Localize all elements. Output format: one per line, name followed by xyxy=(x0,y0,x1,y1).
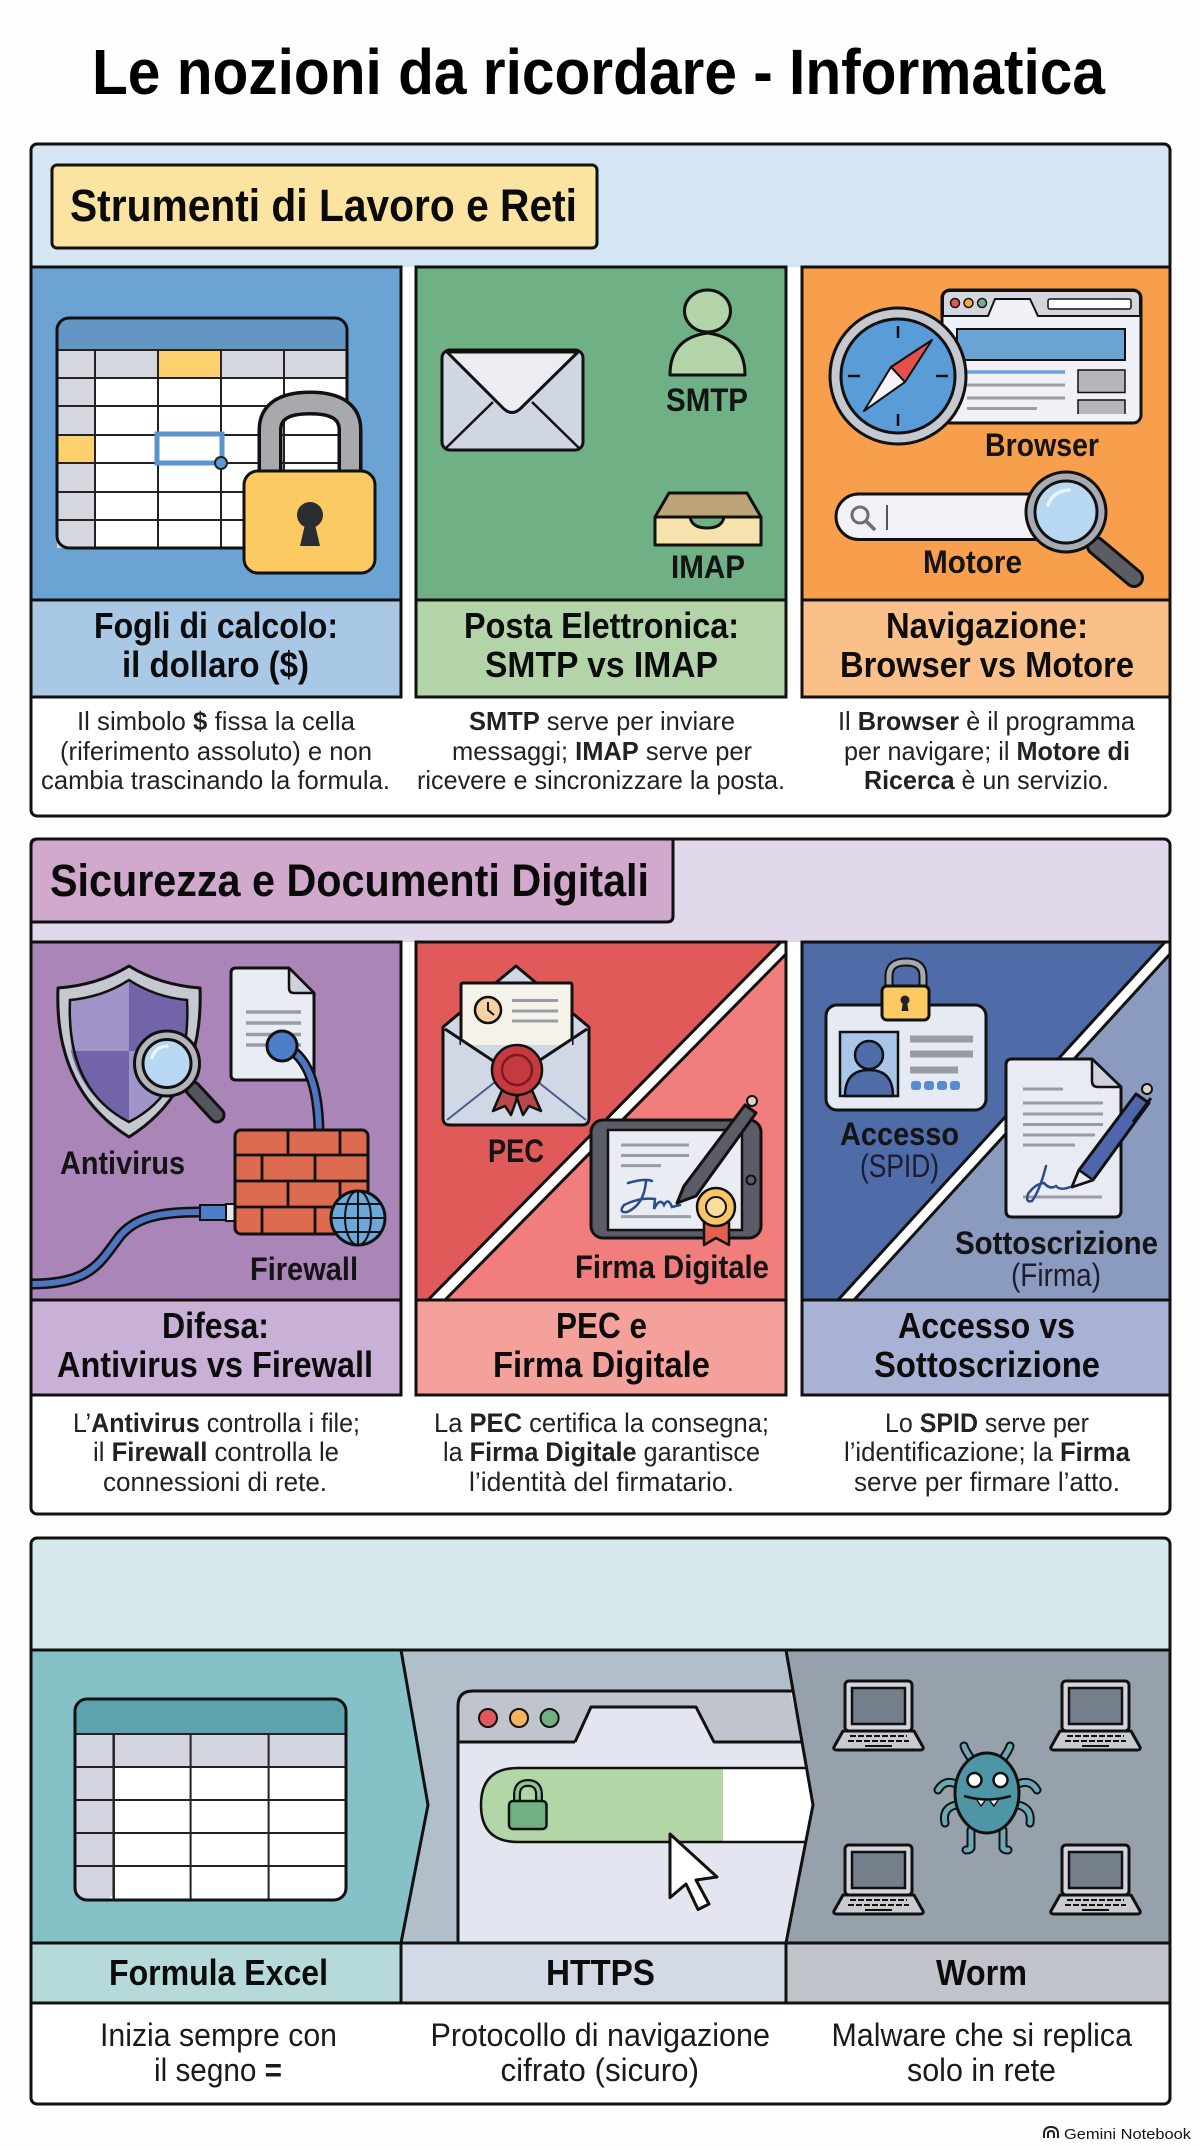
caption: Worm xyxy=(786,1943,1170,2003)
icon: stylus xyxy=(677,1096,757,1203)
description: l’identificazione; la Firma xyxy=(844,1437,1131,1467)
description: Formula Excel xyxy=(100,2017,337,2088)
description: cambia trascinando la formula. xyxy=(41,765,390,795)
card: Navigazione xyxy=(802,267,1170,795)
label: Sottoscrizione (Firma): (Firma) xyxy=(1011,1257,1101,1293)
description: Ricerca è un servizio. xyxy=(864,765,1109,795)
caption bar: SMTP vs IMAP xyxy=(485,644,718,685)
icon: magnifier xyxy=(134,1031,217,1115)
label: Sottoscrizione (Firma): Sottoscrizione xyxy=(955,1225,1158,1261)
icon: globe xyxy=(331,1191,385,1245)
heading: Sicurezza e Documenti Digitali: Sicurezza e Documenti Digitali xyxy=(50,855,649,906)
card: Formula Excel xyxy=(31,1650,428,1943)
caption bar: PEC e xyxy=(556,1305,647,1346)
label: IMAP: IMAP xyxy=(671,549,745,585)
description: l’identità del firmatario. xyxy=(469,1467,734,1497)
heading: Sicurezza e Documenti Digitali xyxy=(31,839,673,922)
icon: tablet with signature xyxy=(591,1120,761,1238)
icon: pen xyxy=(1072,1084,1152,1187)
label: Accesso (SPID) xyxy=(840,1116,959,1184)
description xyxy=(844,1408,1131,1497)
icon: shield xyxy=(58,966,200,1137)
caption: HTTPS: HTTPS xyxy=(546,1952,655,1993)
description: HTTPS xyxy=(430,2017,770,2088)
description: SMTP serve per inviare xyxy=(469,706,735,736)
icon: PEC envelope xyxy=(443,966,589,1125)
title: Le nozioni da ricordare - Informatica xyxy=(92,36,1105,108)
label: Browser: Browser xyxy=(985,427,1099,463)
caption bar: Firma Digitale xyxy=(493,1344,710,1385)
description: il Firewall controlla le xyxy=(93,1437,339,1467)
icon: person SMTP xyxy=(670,290,745,375)
icon: padlock xyxy=(882,962,929,1020)
label: Accesso (SPID): Accesso xyxy=(840,1116,959,1152)
description: Lo SPID serve per xyxy=(885,1408,1089,1438)
description: connessioni di rete. xyxy=(103,1467,327,1497)
description: Worm xyxy=(832,2017,1132,2088)
caption bar: Navigazione: xyxy=(886,605,1088,646)
icon: spreadsheet xyxy=(75,1699,346,1900)
description: Il simbolo $ fissa la cella xyxy=(77,706,356,736)
icon: firewall xyxy=(235,1130,368,1234)
label: Antivirus: Antivirus xyxy=(60,1145,185,1181)
description: (riferimento assoluto) e non xyxy=(60,736,372,766)
description: per navigare; il Motore di xyxy=(844,736,1130,766)
icon: envelope xyxy=(442,350,583,450)
label: Firewall: Firewall xyxy=(250,1251,358,1287)
label: PEC: PEC xyxy=(488,1133,544,1169)
caption bar xyxy=(31,1300,401,1395)
panel: Sicurezza e Documenti Digitali xyxy=(31,839,1170,1514)
footer: Gemini Notebook: Gemini Notebook xyxy=(1064,2127,1192,2143)
caption bar: Antivirus vs Firewall xyxy=(57,1344,373,1385)
caption bar: Fogli di calcolo: xyxy=(94,605,338,646)
label: Firma Digitale: Firma Digitale xyxy=(575,1249,769,1285)
icon: document xyxy=(231,968,314,1080)
caption bar: Browser vs Motore xyxy=(840,644,1134,685)
description: Worm: solo in rete xyxy=(907,2052,1056,2088)
description: HTTPS: Protocollo di navigazione xyxy=(430,2017,770,2053)
caption bar xyxy=(31,600,401,697)
caption bar xyxy=(416,1300,786,1395)
panel: Strumenti di Lavoro e Reti xyxy=(31,144,1170,816)
icon: laptop top left xyxy=(834,1681,923,1750)
caption bar xyxy=(802,600,1170,697)
icon: browser window xyxy=(942,290,1141,423)
heading: Strumenti di Lavoro e Reti xyxy=(52,165,597,248)
description: Formula Excel: Inizia sempre con xyxy=(100,2017,337,2053)
card: HTTPS xyxy=(401,1650,821,1943)
label: Sottoscrizione (Firma) xyxy=(955,1225,1158,1293)
caption bar xyxy=(802,1300,1170,1395)
description: serve per firmare l’atto. xyxy=(854,1467,1120,1497)
caption: Worm: Worm xyxy=(936,1952,1027,1993)
icon: padlock xyxy=(244,403,375,573)
label: Accesso (SPID): (SPID) xyxy=(860,1148,939,1184)
caption bar xyxy=(416,600,786,697)
icon: cable to firewall xyxy=(31,1031,319,1284)
label: Motore: Motore xyxy=(923,544,1022,580)
card: PEC e Firma Digitale xyxy=(416,942,786,1497)
icon: cursor xyxy=(670,1834,717,1910)
caption: Formula Excel xyxy=(31,1943,401,2003)
description xyxy=(434,1408,769,1497)
icon: inbox tray IMAP xyxy=(655,493,761,545)
icon: magnifier xyxy=(1026,472,1134,578)
card: Posta Elettronica xyxy=(416,267,786,795)
icon: signed document xyxy=(1006,1059,1121,1217)
description: Worm: Malware che si replica xyxy=(832,2017,1132,2053)
icon: worm bug xyxy=(938,1746,1037,1850)
icon: lock xyxy=(509,1783,546,1829)
icon: laptop bottom right xyxy=(1051,1845,1140,1914)
caption: HTTPS xyxy=(401,1943,786,2003)
icon: laptop bottom left xyxy=(834,1845,923,1914)
description: HTTPS: cifrato (sicuro) xyxy=(500,2052,699,2088)
description xyxy=(73,1408,360,1497)
caption bar: il dollaro ($) xyxy=(122,644,309,685)
caption bar: Sottoscrizione xyxy=(874,1344,1100,1385)
icon: spreadsheet xyxy=(57,318,347,548)
description: ricevere e sincronizzare la posta. xyxy=(417,765,785,795)
panel: Formula Excel, HTTPS, Worm xyxy=(31,1538,1170,2104)
description xyxy=(838,706,1136,795)
description xyxy=(41,706,390,795)
description xyxy=(417,706,785,795)
description: la Firma Digitale garantisce xyxy=(443,1437,760,1467)
card: Fogli di calcolo xyxy=(31,267,401,795)
description: La PEC certifica la consegna; xyxy=(434,1408,769,1438)
icon: ID card xyxy=(826,1005,986,1110)
description: Il Browser è il programma xyxy=(838,706,1136,736)
caption bar: Accesso vs xyxy=(898,1305,1075,1346)
label: SMTP: SMTP xyxy=(666,382,748,418)
icon: search bar xyxy=(836,494,1056,540)
description: messaggi; IMAP serve per xyxy=(452,736,752,766)
caption bar: Difesa: xyxy=(162,1305,269,1346)
icon: browser HTTPS xyxy=(458,1691,821,1943)
icon: badge xyxy=(697,1188,735,1245)
caption: Formula Excel: Formula Excel xyxy=(109,1952,328,1993)
heading: Strumenti di Lavoro e Reti: Strumenti di Lavoro e Reti xyxy=(70,180,577,231)
caption bar: Posta Elettronica: xyxy=(464,605,739,646)
card: Worm xyxy=(786,1650,1170,1943)
card: Accesso vs Sottoscrizione xyxy=(802,942,1170,1497)
icon: laptop top right xyxy=(1051,1681,1140,1750)
icon: compass xyxy=(830,308,966,444)
card: Difesa xyxy=(31,942,401,1497)
description: Formula Excel: il segno = xyxy=(154,2052,282,2088)
description: L’Antivirus controlla i file; xyxy=(73,1408,360,1438)
